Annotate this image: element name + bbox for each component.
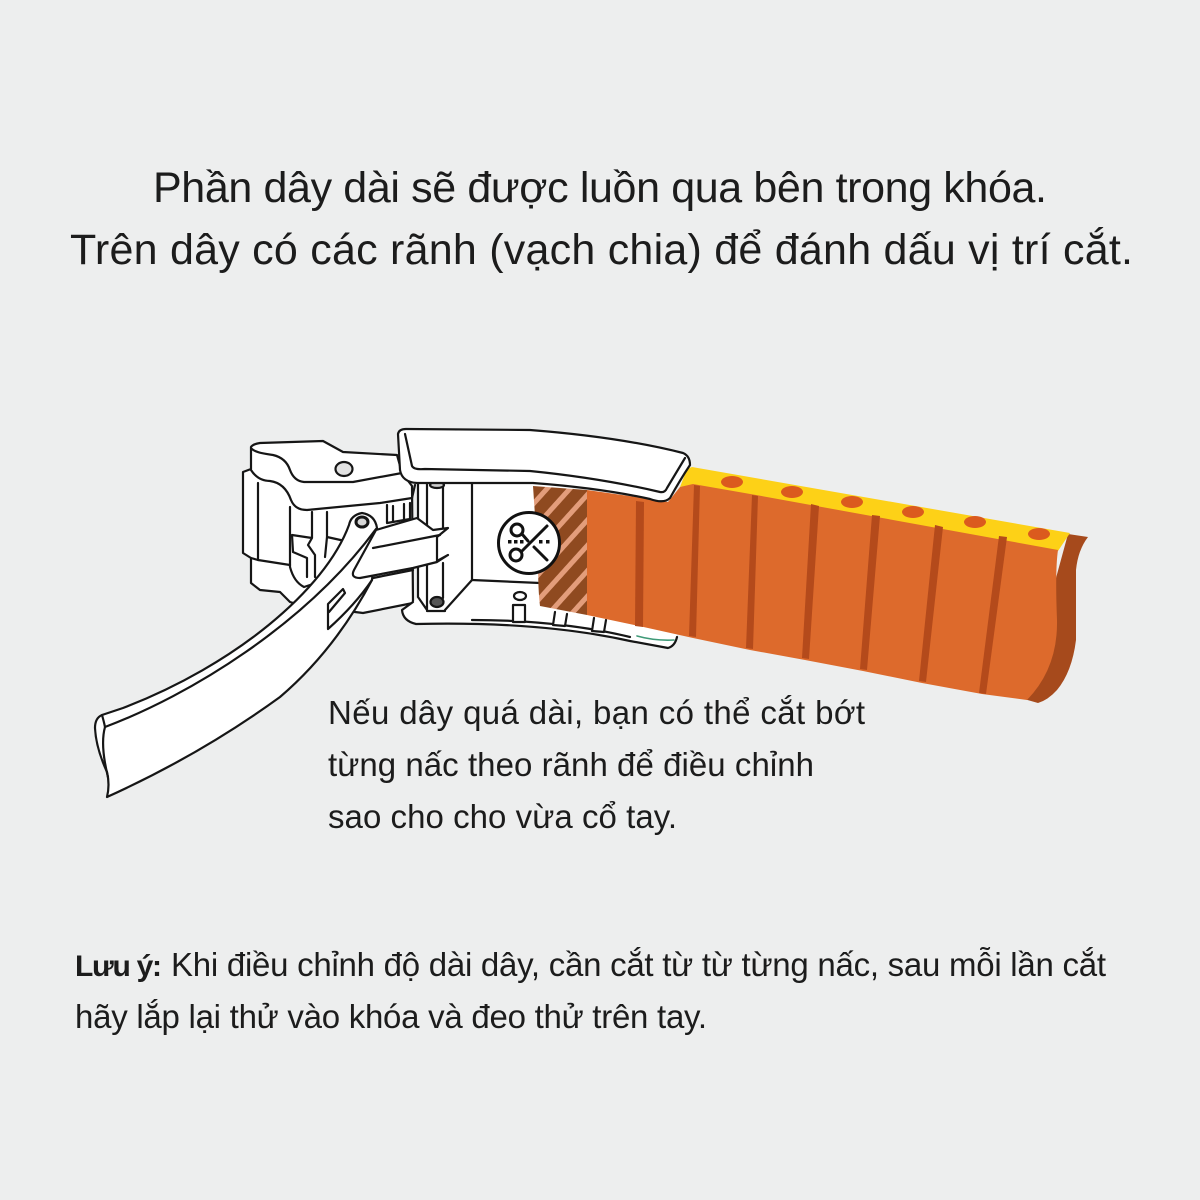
title: Phần dây dài sẽ được luồn qua bên trong khóa. [153,164,1047,212]
buckle cover [398,429,690,501]
cutting instruction text [328,694,865,835]
note text: Khi điều chỉnh độ dài dây, cần cắt từ từ từng nấc, sau mỗi lần cắt [171,946,1106,983]
note text: hãy lắp lại thử vào khóa và đeo thử trên tay. [75,998,707,1035]
buckle main plate [402,480,677,648]
rivet [336,462,352,476]
strap grooves [635,485,1007,694]
note text [75,946,1106,1035]
title [70,164,1133,274]
strap right end [1024,534,1088,703]
strap cut zone hatching [533,486,587,615]
title: Trên dây có các rãnh (vạch chia) để đánh dấu vị trí cắt. [70,226,1133,274]
strap yellow top [680,467,1070,551]
scissors cut icon [498,512,560,574]
buckle cross bar [353,518,448,578]
strap front face [587,484,1058,700]
note text: Lưu ý: [75,950,162,983]
orange strap [587,467,1088,703]
cutting instruction text: sao cho cho vừa cổ tay. [328,798,677,835]
cutting instruction text: từng nấc theo rãnh để điều chỉnh [328,746,814,783]
lower strap band [95,513,377,797]
watch buckle and strap illustration [95,429,1088,797]
buckle rear mechanism [243,441,415,613]
strap holes [721,476,1050,540]
cutting instruction text: Nếu dây quá dài, bạn có thể cắt bớt [328,694,865,731]
